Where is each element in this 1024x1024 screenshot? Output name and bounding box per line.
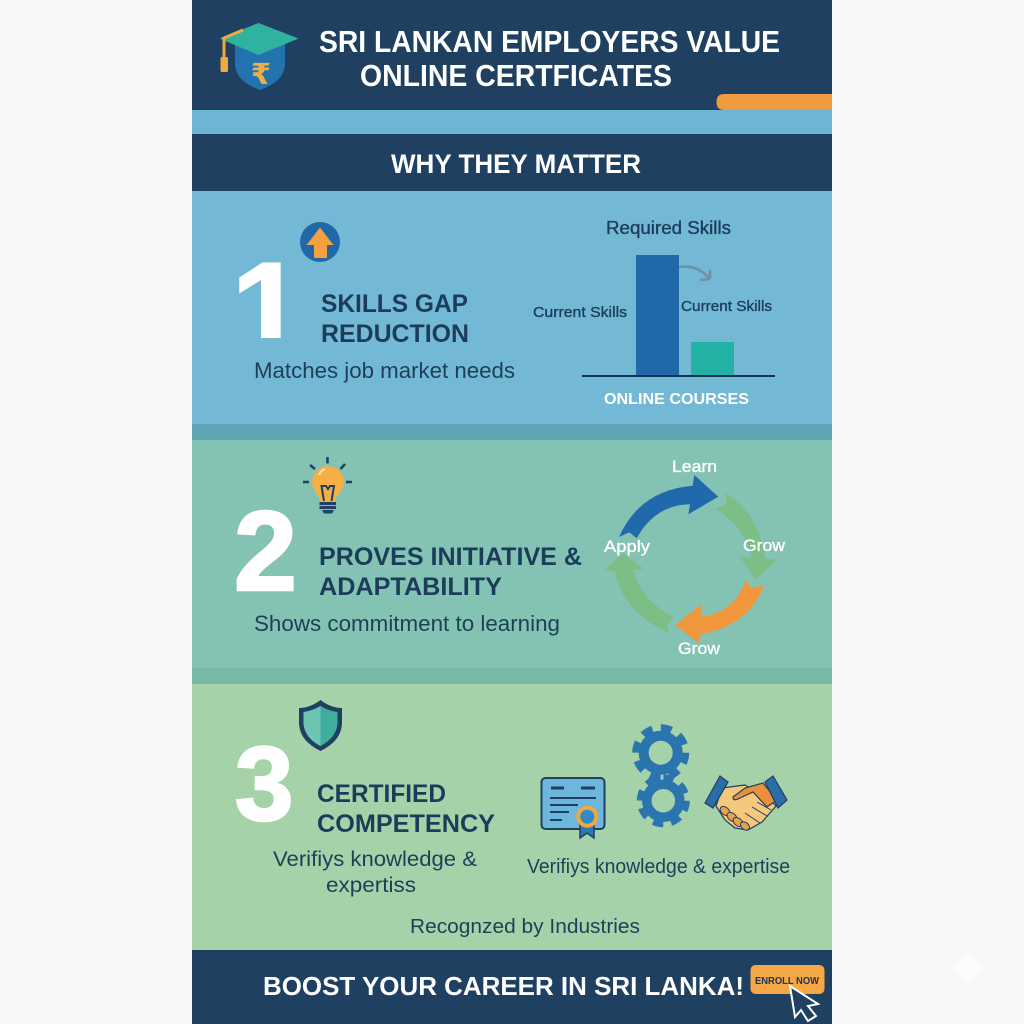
section heading bar [192,134,832,191]
enroll now button: ENROLL NOW [755,975,819,987]
icon: graduation cap with rupee shield: ₹ [251,57,271,91]
panel: certified competency [192,684,832,950]
bar chart: skills: ONLINE COURSES [604,391,749,408]
header panel [192,0,832,110]
bar chart: skills: Current Skills [681,298,772,315]
icon: certificate [542,778,604,838]
title: SRI LANKAN EMPLOYERS VALUE [319,24,780,59]
text: verifies knowledge [273,848,477,897]
number 3: 3 [235,726,293,843]
heading: skills gap reduction: SKILLS GAP [321,290,468,318]
cycle diagram: Learn [672,457,717,476]
title: ONLINE CERTFICATES [360,58,672,93]
cycle diagram: Apply [604,537,651,556]
cycle diagram [604,457,786,658]
cycle diagram: Grow [678,639,721,658]
heading: certified competency: COMPETENCY [317,810,495,838]
panel: skills gap reduction [192,191,832,440]
heading: skills gap reduction [321,290,469,348]
text: matches job market needs: Matches job market needs [254,358,515,383]
title [319,24,780,93]
section heading bar: WHY THEY MATTER [391,149,641,179]
icon: handshake [705,776,787,832]
icon: light bulb [303,457,352,514]
blue divider strip [192,110,832,134]
bar chart: skills: Required Skills [606,218,731,238]
icon: cursor [790,986,818,1021]
icon: up arrow badge [300,222,340,262]
text: shows commitment: Shows commitment to learning [254,611,560,636]
heading: certified competency: CERTIFIED [317,780,446,808]
text: verifies knowledge: expertiss [326,874,416,897]
icon: shield [299,700,342,751]
text: recognized by industries: Recognzed by Industries [410,916,640,938]
heading: proves initiative [319,543,582,601]
watermark sparkle [948,948,988,988]
number 2: 2 [234,488,297,614]
heading: certified competency [317,780,495,838]
heading: skills gap reduction: REDUCTION [321,320,469,348]
text: verifies expertise: Verifiys knowledge & expertise [527,856,790,878]
bar chart: skills [533,218,775,408]
text: verifies knowledge: Verifiys knowledge & [273,848,477,871]
heading: proves initiative: PROVES INITIATIVE & [319,543,582,571]
footer banner [192,950,832,1024]
heading: proves initiative: ADAPTABILITY [319,573,502,601]
orange accent tab [716,94,832,110]
cycle diagram: Grow [743,536,786,555]
enroll now button [750,965,824,994]
footer call to action text: BOOST YOUR CAREER IN SRI LANKA! [263,971,744,1001]
bar chart: skills: Current Skills [533,304,627,321]
icon: gears [636,728,687,824]
number 1: 1 [231,235,304,382]
panel: proves initiative and adaptability [192,440,832,684]
icon: graduation cap with rupee shield [220,23,298,91]
